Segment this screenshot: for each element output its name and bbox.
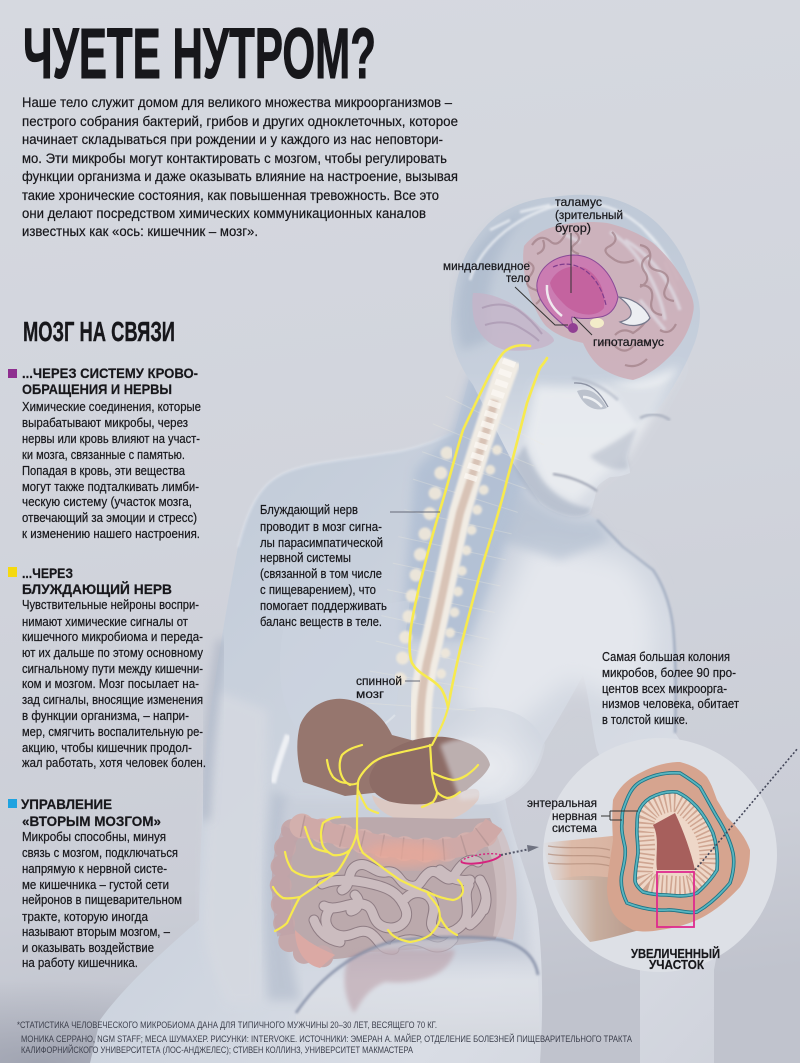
pink glow xyxy=(363,842,447,868)
transverse colon core xyxy=(302,824,494,850)
neck vertebrae xyxy=(470,360,510,480)
thalamus arc detail xyxy=(553,264,606,305)
section heading: ...ЧЕРЕЗ xyxy=(22,565,73,581)
marker: colon section ellipse xyxy=(461,854,501,864)
label: enteric nervous system: нервная xyxy=(552,811,597,823)
inner wall xyxy=(635,792,717,896)
small intestine tube shadow xyxy=(314,860,486,949)
head xyxy=(451,195,700,517)
purple bullet xyxy=(8,369,17,378)
section text: акцию, чтобы кишечник продол- xyxy=(22,741,192,755)
section text: зад сигналы, вносящие изменения xyxy=(22,693,203,707)
callout: largest colony: низмов человека, обитает xyxy=(602,697,739,711)
callout: vagus nerve: проводит в мозг сигна- xyxy=(260,520,382,534)
transverse colon xyxy=(302,824,494,850)
section text: связь с мозгом, подключаться xyxy=(22,846,178,860)
label: enteric nervous system: система xyxy=(552,823,598,835)
section heading: УПРАВЛЕНИЕ xyxy=(21,796,112,812)
woman figure xyxy=(90,195,740,1063)
brain xyxy=(472,222,694,380)
skull back shade xyxy=(457,208,530,350)
bottom left vignette xyxy=(0,960,320,1063)
magnified section frame xyxy=(657,872,694,927)
tube folds xyxy=(548,846,610,866)
yellow bullet xyxy=(8,567,17,577)
section text: сигнальному пути между кишечни- xyxy=(22,662,203,676)
organs layer xyxy=(278,699,540,1035)
intro text: функции организма и даже оказывать влияние на настроение, вызывая xyxy=(22,169,458,184)
ascending colon xyxy=(281,830,328,956)
lower pink patch xyxy=(295,930,335,968)
thalamus core xyxy=(550,267,604,315)
panel: second brain xyxy=(8,796,182,970)
vagus nerve in neck xyxy=(410,345,547,707)
label: thalamus: бугор) xyxy=(555,223,591,235)
label: magnified area xyxy=(631,946,720,972)
section text: называют вторым мозгом, – xyxy=(22,925,170,939)
callout: largest colony: микробов, более 90 про- xyxy=(602,666,736,680)
skull highlights xyxy=(470,204,678,292)
title: ЧУЕТЕ НУТРОМ? xyxy=(23,15,376,94)
intro text: они делают посредством химических коммуникационных каналов xyxy=(22,206,426,221)
callout: largest colony: в толстой кишке. xyxy=(602,713,688,727)
footer credits: *СТАТИСТИКА ЧЕЛОВЕЧЕСКОГО МИКРОБИОМА ДАНА ДЛЯ ТИПИЧНОГО МУЖЧИНЫ 20–30 ЛЕТ, ВЕСЯЩЕГО 70 КГ. xyxy=(17,1020,437,1031)
cord xyxy=(420,400,495,740)
brow xyxy=(572,378,618,400)
armpit highlight xyxy=(273,735,288,783)
section text: нейронов в пищеварительном xyxy=(22,893,182,907)
label: spinal cord: мозг xyxy=(356,689,384,701)
left arm tube xyxy=(202,690,268,1005)
label: magnified area: УЧАСТОК xyxy=(649,957,704,972)
colon shade xyxy=(281,830,292,935)
panel: circulation and nerves xyxy=(8,365,201,541)
callout: vagus nerve: баланс веществ в теле. xyxy=(260,615,382,629)
label: enteric nervous system xyxy=(527,798,638,835)
section text: ют их дальше по этому основному xyxy=(22,646,204,660)
callout: largest colony: центов всех микроорга- xyxy=(602,682,727,696)
label: hypothalamus xyxy=(574,317,664,349)
outer wall xyxy=(607,762,750,932)
dotted arrow to inset xyxy=(501,845,539,855)
under jaw neck shade xyxy=(500,490,610,560)
intestines seen through dome xyxy=(344,949,455,1013)
section heading xyxy=(22,365,198,397)
descending colon xyxy=(492,832,507,938)
label: spinal cord xyxy=(356,676,420,701)
section text: кишечного микробиома и переда- xyxy=(22,630,203,644)
section heading: ОБРАЩЕНИЯ И НЕРВЫ xyxy=(22,381,172,397)
section heading: БЛУЖДАЮЩИЙ НЕРВ xyxy=(22,580,172,597)
label: hypothalamus: гипоталамус xyxy=(593,337,664,349)
dotted line off page xyxy=(695,748,798,870)
callout: vagus nerve xyxy=(260,503,440,629)
callout: vagus nerve: лы парасимпатической xyxy=(260,536,383,550)
label: amygdala: миндалевидное xyxy=(443,261,530,273)
label: amygdala: тело xyxy=(506,273,530,285)
section text: ком и мозгом. Мозг посылает на- xyxy=(22,677,199,691)
label: thalamus: (зрительный xyxy=(555,210,623,222)
intro text: такие хронические состояния, как повышенная тревожность. Все это xyxy=(22,188,439,203)
transverse colon folds xyxy=(302,824,494,850)
right breast xyxy=(432,707,545,805)
mouth xyxy=(553,474,597,491)
section text xyxy=(22,598,206,770)
jaw shadow xyxy=(513,445,591,517)
amygdala xyxy=(568,323,578,333)
limbic system xyxy=(537,255,618,332)
neck translucency xyxy=(400,360,545,640)
brow ridge shade xyxy=(600,372,680,425)
villi stripes xyxy=(643,802,709,886)
section heading: «ВТОРЫМ МОЗГОМ» xyxy=(22,813,161,829)
brain glare xyxy=(560,232,680,330)
section text xyxy=(22,830,182,970)
section text: Попадая в кровь, эти вещества xyxy=(22,464,185,478)
colon tube xyxy=(543,835,625,880)
left arm outer shadow xyxy=(205,640,222,820)
section text: тракте, которую иногда xyxy=(22,910,148,924)
callout: vagus nerve: (связанной в том числе xyxy=(260,567,382,581)
left breast lower curve xyxy=(300,715,395,742)
section text: жал работать, хотя человек болен. xyxy=(22,756,206,770)
label: magnified area: УВЕЛИЧЕННЫЙ xyxy=(631,946,720,961)
vagus branches over organs xyxy=(273,697,478,942)
intro text: пестрого собрания бактерий, грибов и других одноклеточных, которое xyxy=(22,114,458,129)
left eye xyxy=(640,414,670,420)
outer nerve plexus ring xyxy=(621,773,734,912)
intro text: начинает складываться при рождении и у каждого из нас неповтори- xyxy=(22,132,443,147)
cerebellum xyxy=(472,293,554,351)
tube lower shadow xyxy=(553,876,640,942)
nerve rootlets xyxy=(420,420,495,730)
section text: к изменению нашего настроения. xyxy=(22,527,200,541)
label: amygdala xyxy=(443,261,568,325)
callout: vagus nerve: нервной системы xyxy=(260,551,351,565)
hip dome xyxy=(296,937,540,1035)
section text: нимают химические сигналы от xyxy=(22,615,188,629)
footer credits: КАЛИФОРНИЙСКОГО УНИВЕРСИТЕТА (ЛОС-АНДЖЕЛЕС); СТИВЕН КОЛЛИНЗ, УНИВЕРСИТЕТ МАКМАСТЕРА xyxy=(21,1044,414,1056)
stomach lower pale xyxy=(372,789,479,823)
nose shading xyxy=(590,427,637,469)
intro text: мо. Эти микробы могут контактировать с мозгом, чтобы регулировать xyxy=(22,151,447,166)
outer ring light xyxy=(621,773,734,912)
dome edge xyxy=(296,937,538,1013)
callout: largest colony xyxy=(602,650,739,727)
hypothalamus glow xyxy=(590,318,604,328)
section text: ческую систему (участок мозга, xyxy=(22,495,192,509)
torso belly tone xyxy=(283,800,530,960)
face light xyxy=(525,365,680,503)
section heading: ...ЧЕРЕЗ СИСТЕМУ КРОВО- xyxy=(22,365,198,381)
label: thalamus xyxy=(555,197,623,293)
intro text xyxy=(22,95,458,239)
callout: vagus nerve: Блуждающий нерв xyxy=(260,503,358,517)
cerebrum xyxy=(523,222,694,380)
section text: в функции организма, – напри- xyxy=(22,709,189,723)
section heading xyxy=(22,565,172,597)
section text: нервы или кровь влияют на участ- xyxy=(22,432,200,446)
section text: Химические соединения, которые xyxy=(22,400,201,414)
intro text: известных как «ось: кишечник – мозг». xyxy=(22,224,258,239)
left shoulder rim light xyxy=(238,432,455,547)
inset disc xyxy=(543,738,777,972)
heading: brain connected: МОЗГ НА СВЯЗИ xyxy=(23,316,175,347)
right breast over organs xyxy=(440,738,512,800)
inner nerve plexus ring xyxy=(635,792,717,896)
label: thalamus: таламус xyxy=(555,197,602,209)
lumen xyxy=(653,813,695,870)
callout: largest colony: Самая большая колония xyxy=(602,650,730,664)
left breast xyxy=(280,600,410,746)
panel: vagus nerve xyxy=(8,565,206,770)
ventricle xyxy=(619,297,650,325)
small intestine tube xyxy=(314,860,486,949)
label: spinal cord: спинной xyxy=(356,676,402,688)
white crescent xyxy=(547,285,562,316)
blue bullet xyxy=(8,799,17,808)
section text: и оказывать воздействие xyxy=(22,941,154,955)
liver shape xyxy=(297,699,430,796)
inset circle: colon cross-section xyxy=(543,738,798,972)
label: enteric nervous system: энтеральная xyxy=(527,798,597,810)
section text: вырабатывают микробы, через xyxy=(22,416,188,430)
section text: могут также подталкивать лимби- xyxy=(22,480,199,494)
spinal cord xyxy=(400,360,510,740)
section text: напрямую к нервной систе- xyxy=(22,862,167,876)
footer credits xyxy=(17,1020,633,1056)
section heading xyxy=(21,796,161,829)
section text: ки мозга, связанные с памятью. xyxy=(22,448,185,462)
cerebellum folds xyxy=(482,304,542,341)
section text: Микробы способны, минуя xyxy=(22,830,166,844)
callout: vagus nerve: с пищеварением), что xyxy=(260,583,376,597)
section text: на работу кишечника. xyxy=(22,956,138,970)
chest highlight xyxy=(460,540,654,740)
intro text: Наше тело служит домом для великого множества микроорганизмов – xyxy=(22,95,452,110)
brain folds xyxy=(527,232,676,366)
footer credits: МОНИКА СЕРРАНО, NGM STAFF; МЕСА ШУМАХЕР. РИСУНКИ: INTERVOKE. ИСТОЧНИКИ: ЭМЕРАН А. МАЙЕР, ОТДЕЛЕНИЕ БОЛЕЗНЕЙ ПИЩЕВАРИТЕЛЬНОГО ТРАКТА xyxy=(21,1033,633,1045)
shoulder edge xyxy=(597,520,676,733)
section text: отвечающий за эмоции и стресс) xyxy=(22,511,197,525)
stomach shape xyxy=(369,737,490,806)
body silhouette xyxy=(90,375,740,1063)
section text: ме кишечника – густой сети xyxy=(22,878,169,892)
torso flank shade xyxy=(265,790,300,1000)
right eye xyxy=(574,383,608,409)
belly intestine mass xyxy=(278,817,506,959)
section text: мер, смягчить воспалительную ре- xyxy=(22,725,203,739)
spine glow xyxy=(420,360,510,740)
left vertebra blobs xyxy=(400,453,447,680)
section text xyxy=(22,400,201,541)
section text: Чувствительные нейроны воспри- xyxy=(22,598,199,612)
callout: vagus nerve: помогает поддерживать xyxy=(260,599,387,613)
inner ring light xyxy=(635,792,717,896)
right vertebra blobs xyxy=(440,450,497,680)
